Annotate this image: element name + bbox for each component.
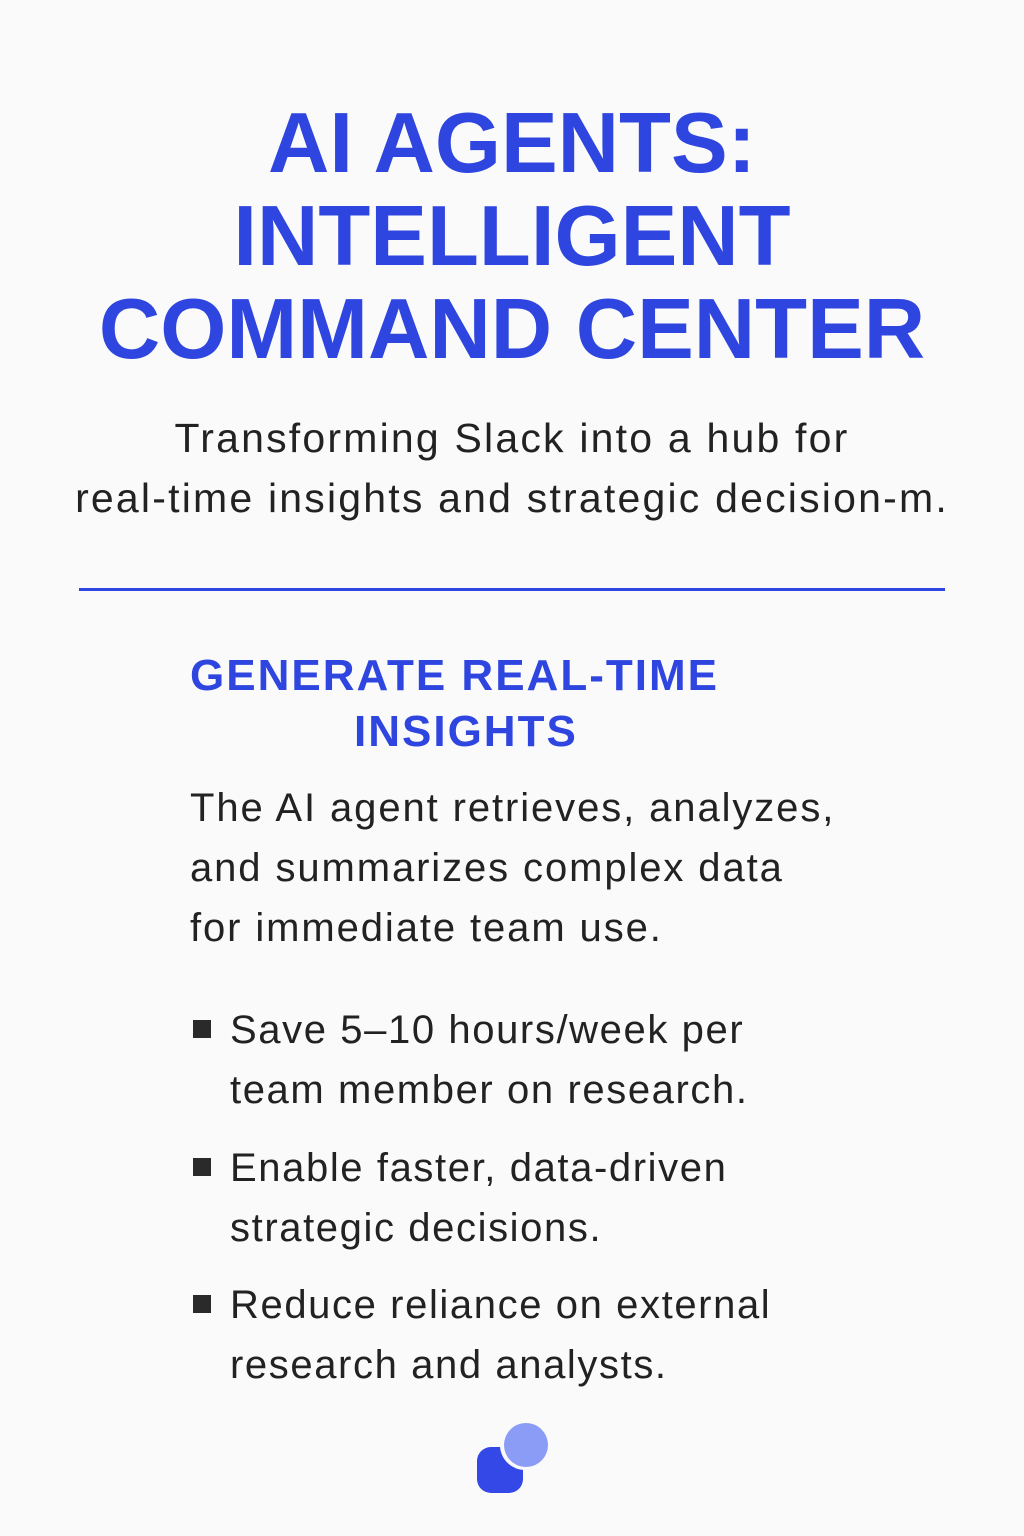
subtitle: real-time insights and strategic decision-m.	[75, 475, 949, 521]
bullet 1: Save 5–10 hours/week per	[230, 1008, 744, 1052]
bullet 2: strategic decisions.	[230, 1206, 602, 1250]
bullet 2	[193, 1146, 727, 1250]
bullet 1: team member on research.	[230, 1068, 749, 1112]
bullet list	[193, 1008, 771, 1387]
body text	[190, 786, 835, 950]
subtitle: Transforming Slack into a hub for	[175, 415, 849, 461]
bullet 3	[193, 1283, 771, 1387]
bullet 3: research and analysts.	[230, 1343, 668, 1387]
bullet 2: Enable faster, data-driven	[230, 1146, 727, 1190]
body text: The AI agent retrieves, analyzes,	[190, 786, 835, 830]
bullet 1	[193, 1008, 749, 1112]
bullet 3: Reduce reliance on external	[230, 1283, 771, 1327]
section heading: GENERATE REAL-TIME	[190, 651, 719, 700]
title: COMMAND CENTER	[99, 282, 925, 377]
subtitle	[75, 415, 949, 521]
section heading	[190, 651, 719, 756]
title	[99, 96, 925, 377]
icon: logo	[477, 1423, 548, 1493]
body text: and summarizes complex data	[190, 846, 784, 890]
title: INTELLIGENT	[233, 189, 791, 284]
section heading: INSIGHTS	[354, 707, 578, 756]
body text: for immediate team use.	[190, 906, 663, 950]
title: AI AGENTS:	[268, 96, 756, 191]
